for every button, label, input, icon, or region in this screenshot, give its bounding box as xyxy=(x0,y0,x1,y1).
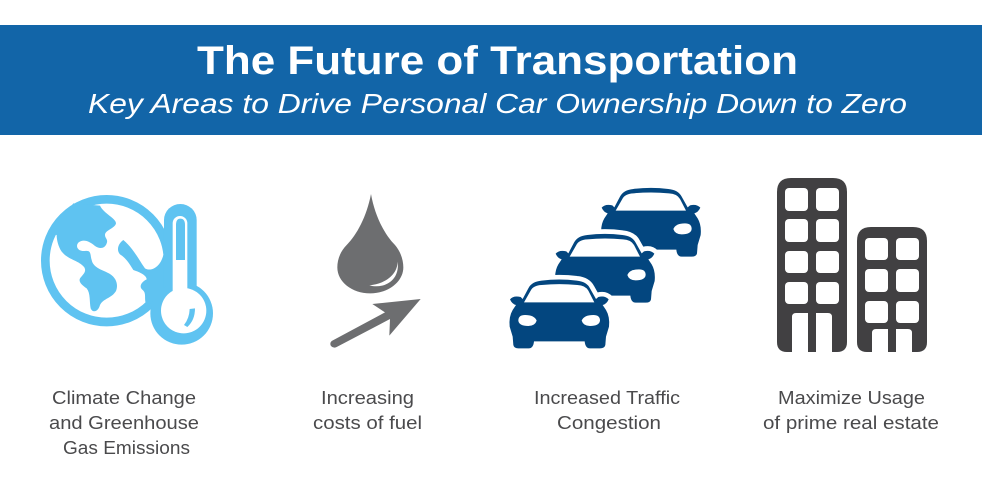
title: The Future of Transportation xyxy=(197,39,798,83)
thermometer xyxy=(150,204,213,345)
globe xyxy=(45,199,173,322)
label: real estate: of prime real estate xyxy=(763,413,939,433)
label: fuel costs xyxy=(313,388,422,433)
label: climate change: Gas Emissions xyxy=(63,438,190,458)
label: climate change xyxy=(49,388,199,458)
label: climate change: and Greenhouse xyxy=(49,413,199,433)
label: fuel costs: Increasing xyxy=(321,388,414,408)
label: real estate: Maximize Usage xyxy=(778,388,925,408)
icon: two buildings xyxy=(777,178,927,352)
icon: fuel drop with rising arrow xyxy=(330,194,421,348)
short building xyxy=(857,227,927,352)
header banner xyxy=(0,25,982,135)
icon: globe with thermometer xyxy=(45,199,213,345)
label: traffic congestion xyxy=(534,388,680,433)
tall building xyxy=(777,178,847,352)
label: traffic congestion: Increased Traffic xyxy=(534,388,680,408)
icon: three cars in traffic xyxy=(509,188,701,348)
label: traffic congestion: Congestion xyxy=(557,413,661,433)
label: real estate xyxy=(763,388,939,433)
subtitle: Key Areas to Drive Personal Car Ownership Down to Zero xyxy=(88,88,907,119)
rising arrow xyxy=(330,299,421,348)
label: fuel costs: costs of fuel xyxy=(313,413,422,433)
fuel drop xyxy=(337,194,403,293)
label: climate change: Climate Change xyxy=(52,388,196,408)
